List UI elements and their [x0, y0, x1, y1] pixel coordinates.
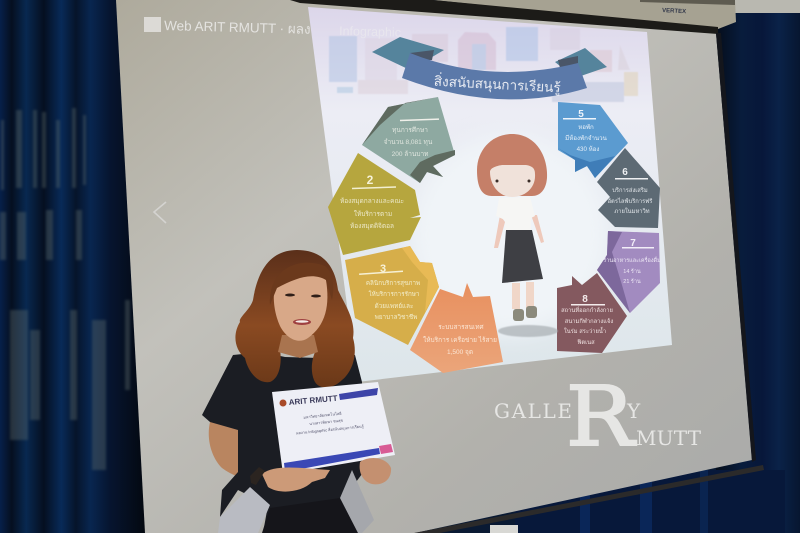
- certificate pink tag: [379, 444, 393, 454]
- ribbon title: สิ่งสนับสนุนการเรียนรู้: [433, 72, 561, 96]
- segment 6: services: [597, 148, 660, 228]
- slide text: Infographic: Infographic: [339, 24, 401, 40]
- woman shirt: [202, 352, 365, 533]
- right curtain: [515, 0, 800, 533]
- ribbon right tail: [555, 48, 607, 78]
- wristwatch: [250, 467, 265, 485]
- header text: Web ARIT RMUTT · ผลงาน: [164, 18, 328, 37]
- segment 3: clinic: ด้วยแพทย์และ: [375, 302, 413, 310]
- segment 8: sports: [557, 273, 627, 353]
- segment 4: network: ระบบสารสนเทศ: [438, 324, 485, 331]
- segment 1: scholarships: [362, 97, 455, 183]
- segment 4: network: 1,500 จุด: [447, 349, 473, 356]
- certificate logo: [280, 400, 286, 406]
- segment 5: dormitory: หอพัก: [578, 124, 594, 131]
- icon: previous arrow: [154, 202, 166, 223]
- segment 8: sports: สนามกีฬากลางแจ้ง: [565, 317, 613, 325]
- cardigan right: [340, 470, 374, 533]
- segment 8: sports: ฟิตเนส: [577, 339, 595, 346]
- air conditioner housing: VERTEX: [662, 8, 686, 15]
- center white wheel: [410, 135, 610, 335]
- socket on wall: [490, 525, 518, 533]
- girl face: [490, 165, 535, 197]
- segment 2: library: ห้องสมุดดิจิตอล: [350, 222, 394, 230]
- segment 7: food: [597, 231, 661, 313]
- girl hair: [477, 134, 547, 196]
- segment 6: services: บริการส่งเสริม: [612, 187, 648, 194]
- segment 2: library: ห้องสมุดกลางและคณะ: [340, 197, 404, 205]
- cardigan left: [218, 487, 270, 533]
- ribbon banner: [372, 37, 607, 99]
- certificate infographic tag: [339, 388, 378, 400]
- segment 1: scholarships: 200 ล้านบาท: [392, 150, 428, 158]
- slide infographic: [308, 7, 672, 382]
- segment 2: library: [328, 153, 421, 255]
- segment 8: sports: สถานที่ออกกำลังกาย: [561, 306, 613, 314]
- segment 3: clinic: [345, 246, 439, 345]
- certificate text lines: ผลงาน Infographic สิ่งสนับสนุนการเรียนรู้: [296, 423, 364, 437]
- segment 3: clinic: คลินิกบริการสุขภาพ: [366, 279, 420, 287]
- segment 7: food: 14 ร้าน: [623, 268, 641, 275]
- watermark: GALLERY RMUTT: GALLE: [494, 399, 572, 423]
- segment 5: dormitory: 5: [578, 109, 584, 120]
- certificate footer band: [284, 448, 380, 472]
- slide header label: [144, 17, 328, 37]
- woman face: [274, 274, 327, 341]
- certificate heading: ARIT RMUTT: [288, 394, 338, 407]
- screen right edge: [716, 33, 756, 462]
- certificate text lines: มหาวิทยาลัยเทคโนโลยี: [303, 411, 342, 420]
- girl character: [477, 134, 558, 337]
- icon: web thumbnail: [144, 17, 161, 32]
- girl shirt: [496, 197, 535, 231]
- segment 2: library: ให้บริการตาม: [354, 210, 392, 218]
- air conditioner housing: [433, 0, 736, 29]
- segment 1: scholarships: จำนวน 8,081 ทุน: [384, 138, 433, 146]
- woman right hand: [360, 458, 391, 484]
- certificate text lines: นางสาวพิมพา ชนสุข: [309, 418, 344, 427]
- watermark: GALLERY RMUTT: MUTT: [636, 426, 702, 450]
- segment 8: sports: 8: [582, 294, 588, 305]
- segment 4: network: [410, 283, 503, 373]
- watermark: GALLERY RMUTT: R: [566, 370, 636, 465]
- watermark: GALLERY RMUTT: [494, 370, 702, 465]
- segment 3: clinic: 3: [380, 263, 386, 275]
- ribbon left tail: [372, 37, 444, 70]
- girl shoes: [513, 309, 524, 321]
- segment 6: services: อัตรไลฟ์บริการฟรี: [608, 197, 652, 205]
- woman skirt: [262, 498, 358, 533]
- girl legs: [512, 283, 520, 309]
- woman neck: [278, 335, 318, 358]
- segment 2: library: 2: [367, 173, 374, 187]
- segment 1: scholarships: ทุนการศึกษา: [392, 126, 428, 134]
- girl shadow: [498, 325, 558, 337]
- ribbon main: [402, 53, 587, 99]
- woman eyes and smile: [285, 294, 321, 325]
- segment 4: network: ให้บริการ เครือข่าย ไร้สาย: [423, 336, 497, 344]
- segment 7: food: ร้านอาหารและเครื่องดื่ม: [603, 256, 661, 264]
- segment 7: food: 21 ร้าน: [623, 278, 641, 285]
- screen bottom bar: [414, 465, 764, 533]
- segment 3: clinic: ให้บริการการรักษา: [369, 290, 419, 298]
- segment 5: dormitory: 430 ห้อง: [577, 145, 599, 153]
- woman left hand: [262, 468, 330, 492]
- segment 5: dormitory: [558, 102, 628, 178]
- woman fringe: [270, 263, 333, 305]
- left curtain: [0, 0, 146, 533]
- segment 7: food: 7: [630, 238, 636, 249]
- woman arm left: [209, 415, 335, 485]
- certificate: [272, 382, 395, 474]
- city background: [329, 27, 638, 102]
- watermark: GALLERY RMUTT: Y: [626, 399, 641, 423]
- segment 5: dormitory: มีห้องพักจำนวน: [565, 134, 608, 142]
- segment 3: clinic: พยาบาลวิชาชีพ: [375, 313, 417, 321]
- ceiling strip: [735, 0, 800, 13]
- girl skirt: [502, 230, 543, 283]
- screen top edge: [290, 0, 718, 34]
- girl arms: [494, 215, 544, 248]
- woman hair: [235, 250, 355, 388]
- segment 8: sports: ในร่ม สระว่ายน้ำ: [564, 326, 606, 335]
- segment 6: services: 6: [622, 167, 628, 178]
- segment 6: services: ภายในมหาวิท: [614, 207, 650, 215]
- woman holding certificate: [202, 250, 395, 533]
